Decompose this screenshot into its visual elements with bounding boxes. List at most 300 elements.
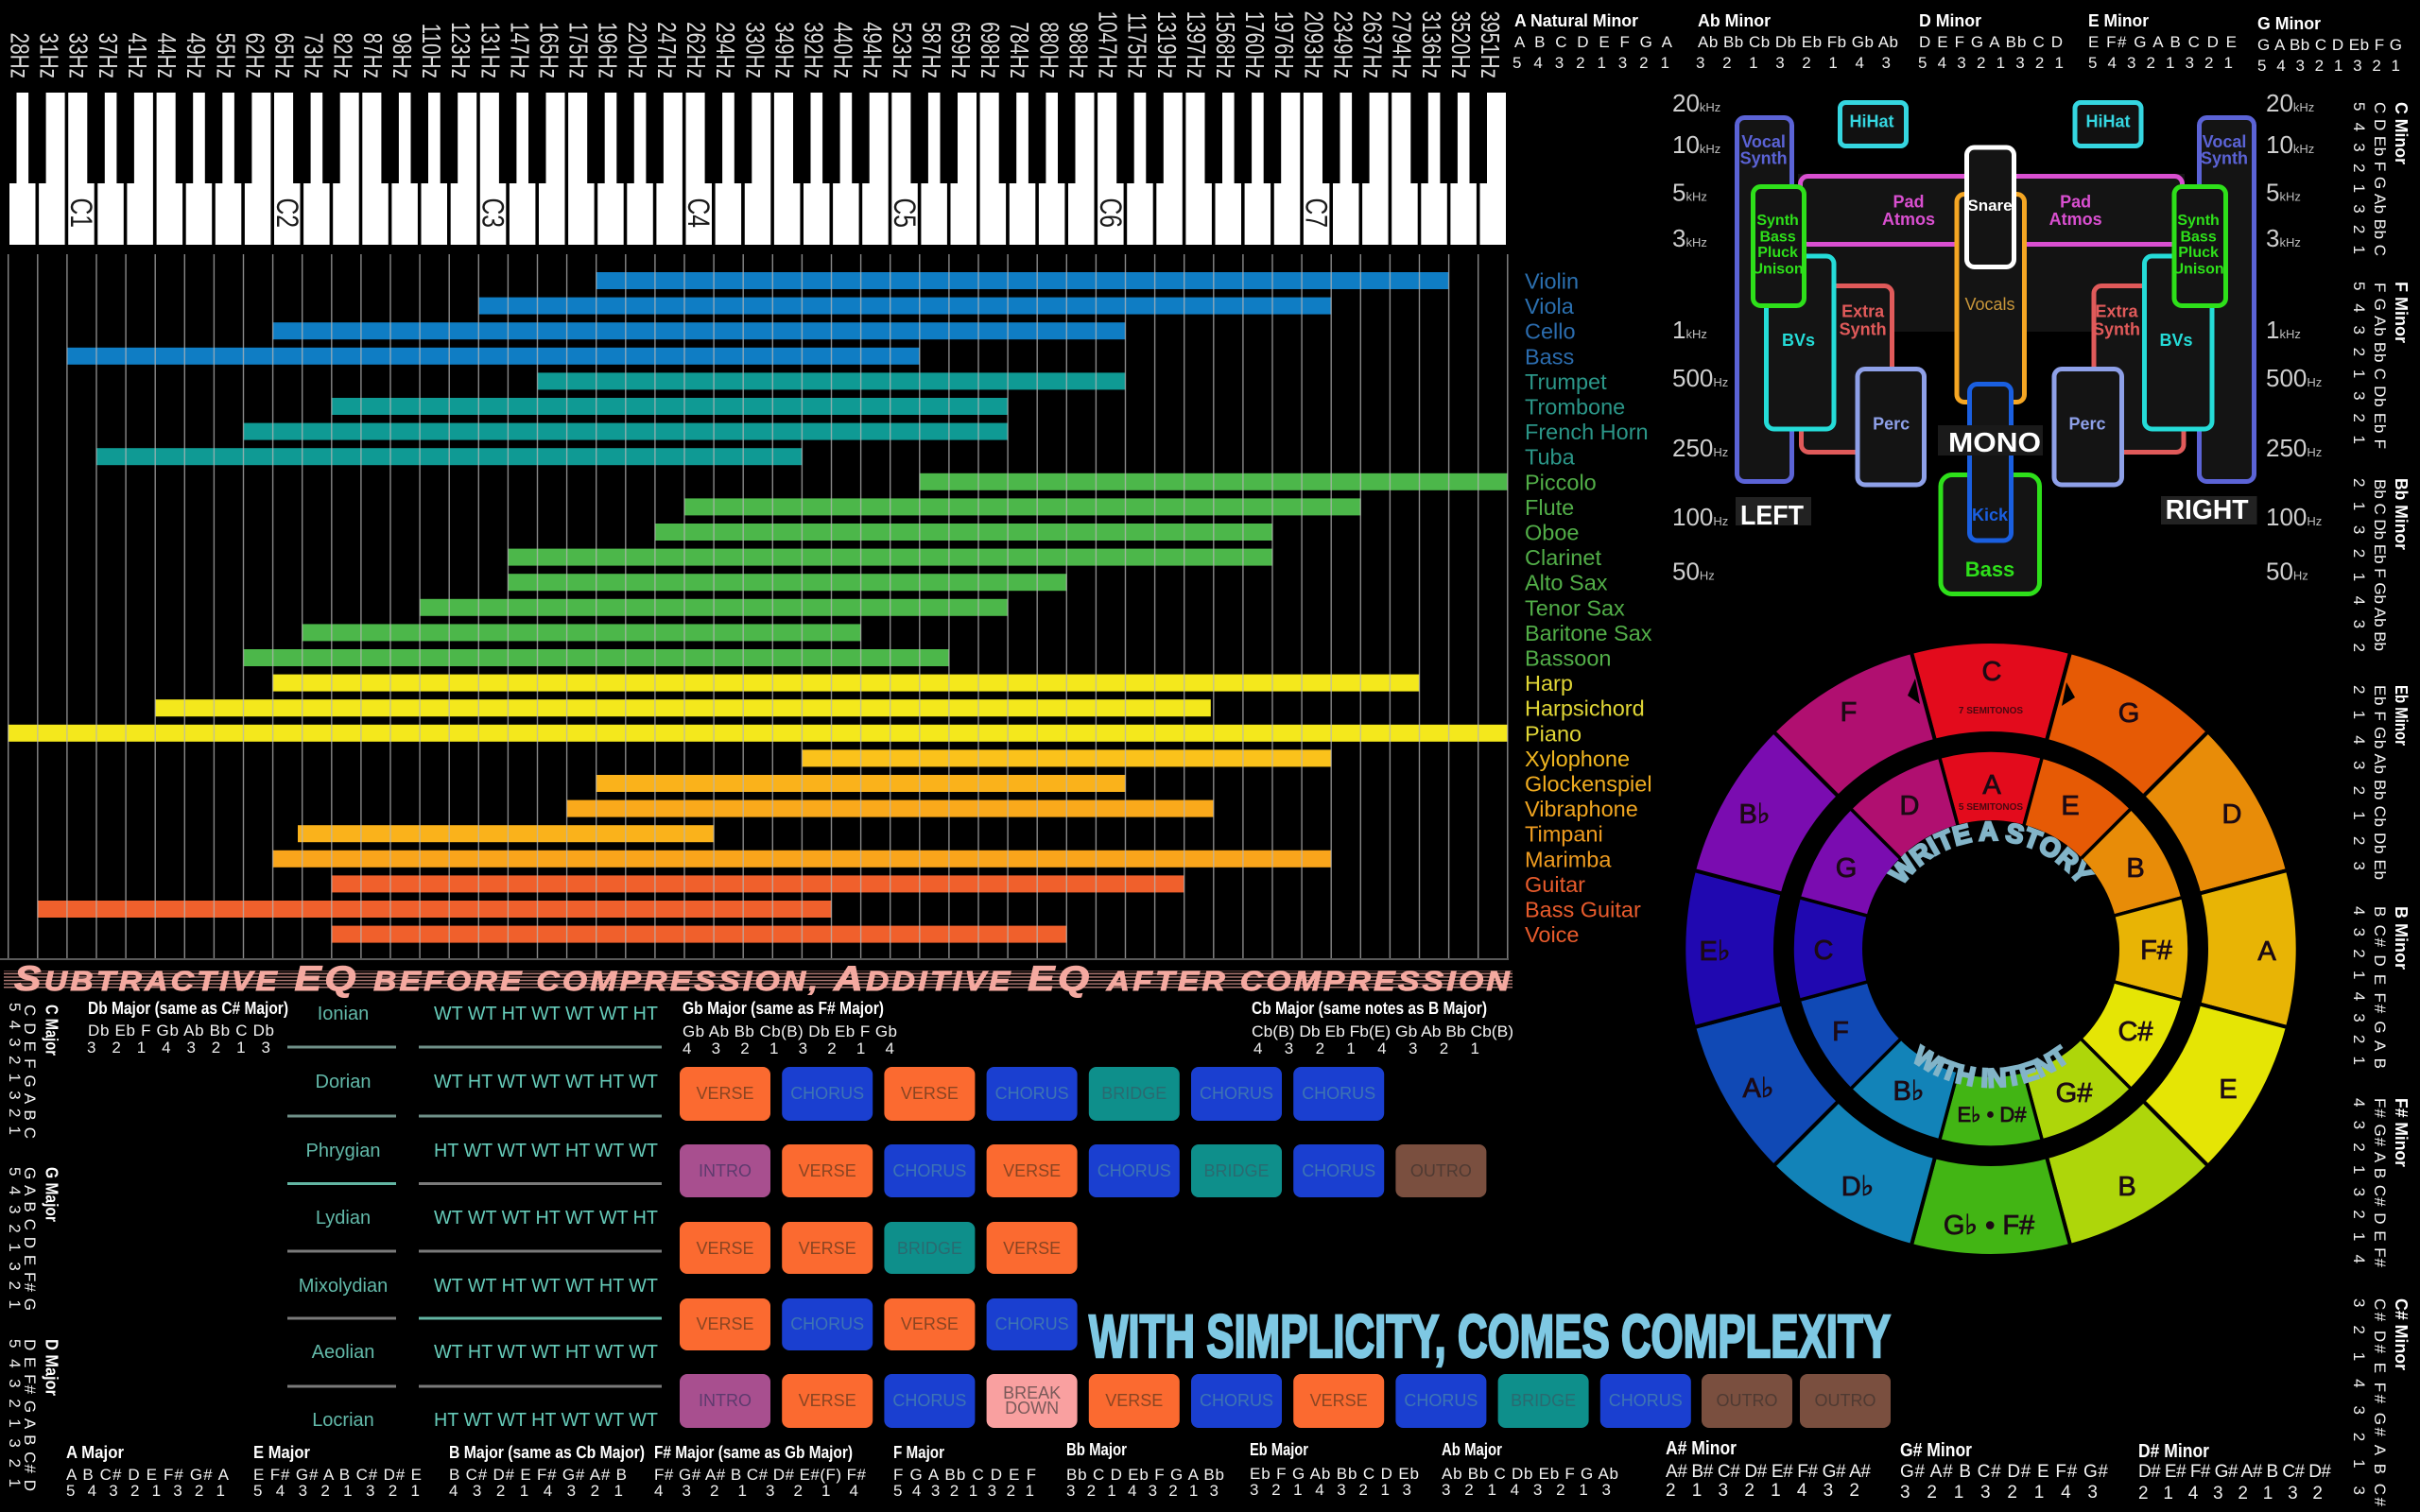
hihat left: HiHat	[1849, 112, 1894, 131]
song structure row 5	[680, 1374, 1891, 1428]
song structure row 1: CHORUS	[1302, 1084, 1375, 1103]
frequency labels above keyboard: 698Hz	[975, 22, 1004, 78]
black keys	[0, 91, 1487, 183]
top key tables: minor scales: Ab Bb Cb Db Eb Fb Gb Ab	[1698, 33, 1898, 51]
inner wheel labels: B♭	[1893, 1076, 1925, 1107]
bottom key tables: major and minor scales: Bb C D Eb F G A Bb	[1066, 1466, 1224, 1484]
key table: Gb Major: Gb Major (same as F# Major)	[683, 999, 884, 1018]
song structure row 4: VERSE	[901, 1314, 959, 1333]
frequency labels above keyboard	[5, 11, 1504, 78]
frequency labels above keyboard: 98Hz	[387, 33, 416, 78]
octave labels: C6	[1093, 198, 1127, 228]
inner wheel labels: E♭ • D#	[1957, 1103, 2027, 1126]
frequency labels above keyboard: 880Hz	[1034, 22, 1063, 78]
frequency labels above keyboard: 65Hz	[269, 33, 298, 78]
song structure row 5: CHORUS	[892, 1391, 966, 1410]
song structure row 5: CHORUS	[1200, 1391, 1273, 1410]
bottom key tables: major and minor scales: A# Minor	[1666, 1438, 1737, 1459]
song structure row 4	[680, 1298, 1078, 1350]
frequency scale right: 5kHz	[2266, 178, 2301, 206]
right side key tables: minor scales: 3 2 1 4 3 2 1 3	[2350, 1298, 2368, 1495]
outer wheel labels: A	[2257, 936, 2276, 967]
instrument labels: Cello	[1525, 319, 1576, 344]
frequency scale left: 250Hz	[1672, 434, 1728, 462]
bottom key tables: major and minor scales: Bb Major	[1066, 1440, 1127, 1459]
key table: Db Major	[87, 999, 288, 1057]
synth bass pluck unison left	[1752, 187, 1804, 306]
left label: LEFT	[1740, 501, 1804, 531]
modes table: HT WT WT HT WT WT WT	[434, 1410, 658, 1431]
frequency scale left: 10kHz	[1672, 130, 1720, 159]
instrument labels: Piano	[1525, 721, 1582, 746]
frequency labels above keyboard: 1175Hz	[1122, 12, 1151, 78]
song structure row 1: BRIDGE	[1101, 1084, 1167, 1103]
frequency scale right: 3kHz	[2266, 224, 2301, 252]
song structure row 2: BRIDGE	[1203, 1161, 1270, 1180]
instrument labels: Violin	[1525, 268, 1579, 293]
outer wheel labels: D	[2222, 799, 2241, 830]
outer wheel segments	[1684, 642, 2298, 1256]
left side key tables: major scales: 5 4 3 2 1 3 2 1	[6, 1339, 24, 1487]
bottom key tables: major and minor scales: 5 4 3 2 1 3 2 1	[893, 1482, 1034, 1500]
key table: Cb Major: Cb(B) Db Eb Fb(E) Gb Ab Bb Cb(B)	[1252, 1022, 1513, 1040]
modes table: WT HT WT WT HT WT WT	[434, 1342, 658, 1363]
inner wheel labels: B	[2126, 853, 2145, 884]
EQ banner heading: SUBTRACTIVE EQ BEFORE COMPRESSION, ADDITIVE EQ AFTER COMPRESSION	[14, 959, 1512, 998]
hihat right: HiHat	[2085, 112, 2131, 131]
right side key tables: minor scales: F# Minor	[2392, 1098, 2411, 1167]
circle of fifths	[1685, 644, 2296, 1254]
bottom key tables: major and minor scales: B Major (same as Cb Major)	[449, 1443, 645, 1462]
bottom key tables: major and minor scales: D# E# F# G# A# B C# D#	[2138, 1462, 2331, 1482]
modes table: WT WT WT HT WT WT HT	[434, 1208, 658, 1228]
frequency labels above keyboard: 349Hz	[769, 22, 798, 78]
key table: Cb Major: 4 3 2 1 4 3 2 1	[1253, 1040, 1479, 1057]
frequency labels above keyboard: 494Hz	[857, 22, 887, 78]
pad atmos band: Atmos	[2049, 210, 2102, 229]
top key tables: minor scales: G A Bb C D Eb F G	[2257, 36, 2402, 54]
bottom key tables: major and minor scales: F# G# A# B C# D# E#(F) F#	[654, 1466, 867, 1484]
instrument labels: Tuba	[1525, 445, 1576, 470]
bottom key tables: major and minor scales: F# Major (same as Gb Major)	[654, 1443, 853, 1462]
left side key tables: major scales	[6, 1003, 60, 1491]
top key tables: minor scales: A Natural Minor	[1514, 11, 1638, 30]
instrument labels: Clarinet	[1525, 545, 1601, 570]
right side key tables: minor scales: 2 1 4 3 2 1 2 3	[2350, 685, 2368, 870]
top key tables: minor scales: 5 4 3 2 1 3 2 1	[1918, 54, 2064, 72]
extra synth left: Synth	[1840, 319, 1887, 338]
frequency scale left: 3kHz	[1672, 224, 1707, 252]
outer wheel labels: B♭	[1738, 799, 1771, 830]
frequency labels above keyboard: 294Hz	[710, 22, 739, 78]
right side key tables: minor scales: 5 4 3 2 1 3 2 1	[2350, 102, 2368, 254]
modes table	[287, 1004, 662, 1431]
synth bass pluck unison left: Unison	[1752, 262, 1804, 278]
bottom key tables: major and minor scales: Ab Bb C Db Eb F G Ab	[1442, 1465, 1618, 1483]
frequency labels above keyboard: 37Hz	[93, 33, 122, 78]
synth bass pluck unison left: Synth	[1756, 213, 1799, 229]
modes table: Phrygian	[306, 1141, 380, 1161]
frequency labels above keyboard: 659Hz	[945, 22, 975, 78]
right side key tables: minor scales: Bb Minor	[2392, 478, 2411, 550]
song structure row 2	[680, 1144, 1486, 1197]
inner wheel labels: C	[1814, 936, 1833, 966]
curved text: with intent: WITH INTENT	[1913, 1043, 2066, 1089]
bottom key tables: major and minor scales: D# Minor	[2138, 1441, 2209, 1462]
frequency labels above keyboard: 49Hz	[181, 33, 210, 78]
right side key tables: minor scales: B Minor	[2392, 906, 2411, 970]
frequency labels above keyboard: 1319Hz	[1151, 11, 1181, 78]
right label: RIGHT	[2166, 495, 2249, 525]
synth bass pluck unison right: Pluck	[2178, 245, 2219, 261]
left side key tables: major scales: 5 4 3 2 1 3 2 1	[6, 1003, 24, 1135]
frequency scale right: 100Hz	[2266, 503, 2322, 531]
outer wheel labels	[1699, 657, 2276, 1241]
song structure row 1: CHORUS	[790, 1084, 864, 1103]
song structure row 5: OUTRO	[1815, 1391, 1876, 1410]
top key tables: minor scales: Ab Minor	[1698, 11, 1771, 30]
instrument labels: Glockenspiel	[1525, 771, 1652, 796]
frequency labels above keyboard: 28Hz	[5, 33, 33, 78]
left side key tables: major scales: 5 4 3 2 1 3 2 1	[6, 1167, 24, 1309]
bottom key tables: major and minor scales: E F# G# A B C# D# E	[253, 1466, 422, 1484]
instrument labels: French Horn	[1525, 420, 1649, 444]
inner wheel labels: C#	[2118, 1017, 2153, 1047]
extra synth left	[1802, 285, 1893, 452]
instrument labels: Piccolo	[1525, 470, 1597, 494]
right side key tables: minor scales: Bb C Db Eb F Gb Ab Bb	[2371, 479, 2389, 651]
instrument range bars	[9, 272, 1508, 943]
right side key tables: minor scales: Eb Minor	[2392, 685, 2411, 746]
octave labels: C2	[269, 198, 303, 228]
outer wheel labels: A♭	[1742, 1074, 1774, 1104]
inner wheel labels: G	[1836, 853, 1857, 884]
song structure row 5: OUTRO	[1717, 1391, 1777, 1410]
top key tables: minor scales: E F# G A B C D E	[2088, 33, 2237, 51]
frequency labels above keyboard: 587Hz	[916, 22, 945, 78]
frequency labels above keyboard: 3951Hz	[1475, 11, 1504, 78]
instrument labels: Bass	[1525, 344, 1574, 369]
frequency labels above keyboard: 1976Hz	[1269, 11, 1298, 78]
instrument labels: Flute	[1525, 495, 1574, 520]
octave labels: C7	[1299, 198, 1333, 228]
bottom key tables: major and minor scales: Ab Major	[1442, 1440, 1502, 1459]
key table: Gb Major: 4 3 2 1 3 2 1 4	[683, 1040, 894, 1057]
BVs left: BVs	[1782, 331, 1815, 350]
song structure row 5: BREAK	[1003, 1383, 1061, 1402]
instrument labels: Voice	[1525, 922, 1579, 947]
bottom key tables: major and minor scales: A# B# C# D# E# F# G# A#	[1666, 1462, 1871, 1482]
inner wheel labels: E	[2061, 791, 2080, 821]
instrument labels: Alto Sax	[1525, 571, 1608, 595]
song structure row 5: VERSE	[799, 1391, 856, 1410]
outer wheel labels: E♭	[1699, 936, 1731, 967]
instrument labels: Trombone	[1525, 395, 1625, 420]
bottom key tables: major and minor scales: 4 3 2 1 3 2 1 4	[654, 1482, 858, 1500]
bottom key tables: major and minor scales: B C# D# E F# G# A# B	[449, 1466, 627, 1484]
song structure row 2: CHORUS	[1098, 1161, 1171, 1180]
instrument labels: Harp	[1525, 671, 1573, 696]
key table: Gb Major	[683, 999, 897, 1057]
song structure row 5: VERSE	[1105, 1391, 1163, 1410]
octave labels: C5	[887, 198, 921, 228]
perc right: Perc	[2068, 414, 2106, 433]
frequency labels above keyboard: 175Hz	[563, 22, 592, 78]
right side key tables: minor scales: B C# D E F# G A B	[2371, 906, 2389, 1069]
song structure row 1: VERSE	[696, 1084, 754, 1103]
frequency scale left: 500Hz	[1672, 364, 1728, 392]
frequency scale left: 50Hz	[1672, 558, 1715, 586]
inner wheel segments	[1792, 750, 2189, 1147]
bottom key tables: major and minor scales: G# A# B C# D# E F# G#	[1900, 1462, 2108, 1482]
bottom key tables: major and minor scales: 3 2 1 4 3 2 1 3	[1066, 1482, 1219, 1500]
song structure row 4: CHORUS	[790, 1314, 864, 1333]
bottom key tables: major and minor scales: 4 3 2 1 4 3 2 1	[449, 1482, 623, 1500]
modes table: Lydian	[316, 1208, 371, 1228]
top key tables: minor scales: A B C D E F G A	[1514, 33, 1673, 51]
song structure row 5: CHORUS	[1609, 1391, 1683, 1410]
frequency scale right: 10kHz	[2266, 130, 2314, 159]
left side key tables: major scales: C D E F G A B C	[21, 1005, 39, 1139]
frequency labels above keyboard: 1047Hz	[1093, 11, 1121, 78]
frequency labels above keyboard: 523Hz	[887, 22, 916, 78]
snare	[1966, 147, 2014, 266]
extra synth left: Extra	[1841, 301, 1885, 320]
top key tables: minor scales: G Minor	[2257, 14, 2321, 33]
right side key tables: minor scales: C D Eb F G Ab Bb C	[2371, 102, 2389, 256]
octave labels	[63, 198, 1333, 228]
BVs left	[1766, 256, 1834, 429]
frequency labels above keyboard: 1568Hz	[1210, 11, 1239, 78]
frequency labels above keyboard: 44Hz	[151, 33, 181, 78]
top key tables: minor scales: 3 2 1 3 2 1 4 3	[1696, 54, 1891, 72]
top key tables: minor scales: D E F G A Bb C D	[1919, 33, 2063, 51]
song structure row 3: VERSE	[696, 1239, 754, 1258]
stereo mix diagram	[1736, 102, 2257, 593]
song structure row 5: VERSE	[1310, 1391, 1368, 1410]
frequency labels above keyboard: 2349Hz	[1328, 11, 1357, 78]
semitone notes: 7 SEMITONOS	[1959, 706, 2023, 716]
bass	[1941, 474, 2040, 593]
vocals: Vocals	[1964, 295, 2015, 314]
key table: Db Major: 3 2 1 4 3 2 1 3	[87, 1039, 270, 1057]
song structure row 5: BRIDGE	[1511, 1391, 1576, 1410]
perc left	[1858, 369, 1925, 485]
instrument labels: Guitar	[1525, 872, 1585, 897]
synth bass pluck unison right: Unison	[2172, 262, 2224, 278]
right side key tables: minor scales: 5 4 3 2 1 3 2 1	[2350, 282, 2368, 444]
song structure row 3: VERSE	[1003, 1239, 1061, 1258]
frequency labels above keyboard: 1397Hz	[1181, 11, 1210, 78]
song structure row 2: INTRO	[699, 1161, 752, 1180]
right side key tables: minor scales: C Minor	[2392, 102, 2411, 164]
synth bass pluck unison left: Bass	[1759, 229, 1796, 246]
frequency labels above keyboard: 3136Hz	[1416, 11, 1445, 78]
bottom key tables: major and minor scales: F Major	[893, 1443, 944, 1462]
frequency labels above keyboard: 131Hz	[475, 22, 504, 78]
frequency labels above keyboard: 82Hz	[328, 33, 357, 78]
bottom key tables: major and minor scales: A Major	[66, 1443, 124, 1462]
outer wheel labels: G	[2118, 698, 2139, 729]
instrument labels: Timpani	[1525, 822, 1603, 847]
pad atmos band: Pad	[2060, 193, 2091, 212]
bottom key tables: major and minor scales: F G A Bb C D E F	[893, 1466, 1036, 1484]
frequency labels above keyboard: 330Hz	[739, 22, 769, 78]
frequency labels above keyboard: 147Hz	[505, 22, 533, 78]
song structure row 2: VERSE	[1003, 1161, 1061, 1180]
song structure row 4: CHORUS	[995, 1314, 1069, 1333]
synth bass pluck unison right: Synth	[2177, 213, 2220, 229]
vocals	[1957, 195, 2025, 403]
bottom key tables: major and minor scales: Eb Major	[1250, 1440, 1308, 1459]
vocal synth right: Vocal	[2203, 132, 2246, 151]
instrument labels: Bass Guitar	[1525, 898, 1641, 922]
frequency labels above keyboard: 262Hz	[681, 22, 710, 78]
instrument labels: Baritone Sax	[1525, 621, 1652, 645]
song structure row 2: OUTRO	[1410, 1161, 1472, 1180]
inner wheel labels	[1814, 770, 2172, 1126]
outer wheel labels: G♭ • F#	[1944, 1211, 2034, 1241]
bottom key tables: major and minor scales: G# Minor	[1900, 1440, 1972, 1461]
frequency labels above keyboard: 2093Hz	[1298, 11, 1327, 78]
right side key tables: minor scales: 4 3 2 1 3 2 1 4	[2350, 1098, 2368, 1263]
inner wheel labels: A	[1982, 770, 2001, 800]
song structure row 3: VERSE	[799, 1239, 856, 1258]
instrument labels: Harpsichord	[1525, 696, 1645, 721]
inner wheel labels: F	[1832, 1017, 1849, 1047]
frequency scale right: 1kHz	[2266, 316, 2301, 344]
frequency labels above keyboard: 110Hz	[416, 24, 445, 78]
left side key tables: major scales: G A B C D E F# G	[21, 1167, 39, 1311]
bottom key tables: major and minor scales: E Major	[253, 1443, 310, 1462]
right side key tables: minor scales: C# D# E F# G# A B C#	[2371, 1298, 2389, 1507]
song structure row 5: INTRO	[699, 1391, 752, 1410]
frequency labels above keyboard: 165Hz	[534, 22, 562, 78]
frequency scale right: 250Hz	[2266, 434, 2322, 462]
frequency labels above keyboard: 2794Hz	[1387, 11, 1416, 78]
BVs right	[2144, 256, 2212, 429]
song structure row 2: VERSE	[799, 1161, 856, 1180]
frequency labels above keyboard: 73Hz	[299, 33, 327, 78]
song structure row 2: CHORUS	[892, 1161, 966, 1180]
key table: Cb Major: Cb Major (same notes as B Major)	[1252, 999, 1487, 1018]
modes table: Dorian	[316, 1072, 371, 1092]
vocal synth right	[2199, 117, 2254, 482]
frequency scale right: 500Hz	[2266, 364, 2322, 392]
bottom key tables: major and minor scales: 3 2 1 4 3 2 1 3	[1250, 1481, 1411, 1499]
instrument labels: Xylophone	[1525, 747, 1630, 771]
instrument labels: Vibraphone	[1525, 797, 1638, 821]
frequency labels above keyboard: 41Hz	[122, 33, 151, 78]
right side key tables: minor scales: 4 3 2 1 4 3 2 1	[2350, 906, 2368, 1065]
bottom key tables: major and minor scales: Eb F G Ab Bb C D Eb	[1250, 1465, 1419, 1483]
synth bass pluck unison right	[2172, 187, 2225, 306]
song structure row 5: CHORUS	[1404, 1391, 1478, 1410]
extra synth right: Synth	[2093, 319, 2140, 338]
bottom key tables: major and minor scales	[66, 1438, 2331, 1503]
outer wheel labels: B	[2118, 1172, 2136, 1202]
frequency labels above keyboard: 196Hz	[593, 22, 622, 78]
right side key tables: minor scales: 2 1 3 2 1 4 3 2	[2350, 478, 2368, 652]
vocal synth left: Vocal	[1741, 132, 1786, 151]
frequency labels above keyboard: 33Hz	[63, 33, 93, 78]
modes table: HT WT WT WT HT WT WT	[434, 1141, 658, 1161]
frequency scale right: 50Hz	[2266, 558, 2308, 586]
kick: Kick	[1972, 506, 2009, 524]
mono label: MONO	[1948, 428, 2041, 458]
frequency scale right: 20kHz	[2266, 89, 2314, 117]
frequency labels above keyboard: 220Hz	[622, 22, 651, 78]
song structure row 1	[680, 1067, 1384, 1121]
white keys	[9, 93, 1506, 245]
semitone notes	[1959, 706, 2023, 813]
synth bass pluck unison left: Pluck	[1757, 245, 1798, 261]
modes table: WT HT WT WT WT HT WT	[434, 1072, 658, 1092]
instrument labels: Oboe	[1525, 520, 1579, 544]
frequency labels above keyboard: 31Hz	[34, 33, 62, 78]
extra synth right: Extra	[2095, 301, 2138, 320]
frequency scale left: 20kHz	[1672, 89, 1720, 117]
bottom key tables: major and minor scales: 2 1 4 3 2 1 3 2	[2138, 1484, 2323, 1503]
top key tables: minor scales	[1512, 11, 2402, 75]
octave labels: C4	[681, 198, 715, 228]
song structure row 2: CHORUS	[1302, 1161, 1375, 1180]
right side key tables: minor scales	[2350, 102, 2411, 1507]
modes table: Locrian	[312, 1410, 374, 1431]
right side key tables: minor scales: C# Minor	[2392, 1298, 2411, 1370]
perc left: Perc	[1873, 414, 1910, 433]
top key tables: minor scales: 5 4 3 2 1 3 2 1	[2088, 54, 2233, 72]
vocal synth left	[1737, 117, 1792, 482]
instrument labels: Trumpet	[1525, 369, 1607, 394]
instrument labels: Bassoon	[1525, 646, 1611, 671]
instrument labels: Tenor Sax	[1525, 595, 1625, 620]
modes table: Ionian	[318, 1004, 369, 1024]
top key tables: minor scales: E Minor	[2088, 11, 2149, 30]
frequency labels above keyboard: 784Hz	[1004, 22, 1033, 78]
outer wheel labels: D♭	[1841, 1172, 1874, 1202]
hihat left	[1840, 102, 1906, 146]
right side key tables: minor scales: F# G# A B C# D E F#	[2371, 1098, 2389, 1268]
modes table: WT WT HT WT WT WT HT	[434, 1004, 658, 1024]
right side key tables: minor scales: F G Ab Bb C Db Eb F	[2371, 283, 2389, 449]
vocal synth left: Synth	[1740, 149, 1788, 168]
top key tables: minor scales: D Minor	[1919, 11, 1981, 30]
song structure row 1: CHORUS	[995, 1084, 1069, 1103]
frequency scale left: 100Hz	[1672, 503, 1728, 531]
frequency scale left	[1672, 89, 1728, 586]
frequency labels above keyboard: 62Hz	[240, 33, 268, 78]
frequency labels above keyboard: 87Hz	[357, 33, 387, 78]
piano keyboard	[0, 91, 1506, 245]
bottom key tables: major and minor scales: 5 4 3 2 1 3 2 1	[253, 1482, 420, 1500]
right side key tables: minor scales: F Minor	[2392, 282, 2411, 343]
BVs right: BVs	[2159, 331, 2193, 350]
pad atmos band: Atmos	[1882, 210, 1935, 229]
key table: Db Major: Db Eb F Gb Ab Bb C Db	[88, 1022, 274, 1040]
hihat right	[2075, 102, 2141, 146]
frequency labels above keyboard: 392Hz	[799, 22, 827, 78]
outer wheel labels: C	[1982, 657, 2001, 687]
octave labels: C1	[63, 198, 97, 228]
instrument labels: Marimba	[1525, 847, 1612, 871]
kick	[1970, 384, 2012, 541]
outer wheel labels: E	[2219, 1074, 2238, 1105]
semitone notes: 5 SEMITONOS	[1959, 802, 2023, 813]
left side key tables: major scales: C Major	[42, 1005, 60, 1056]
key table: Cb Major	[1252, 999, 1513, 1057]
left side key tables: major scales: G Major	[42, 1167, 60, 1222]
